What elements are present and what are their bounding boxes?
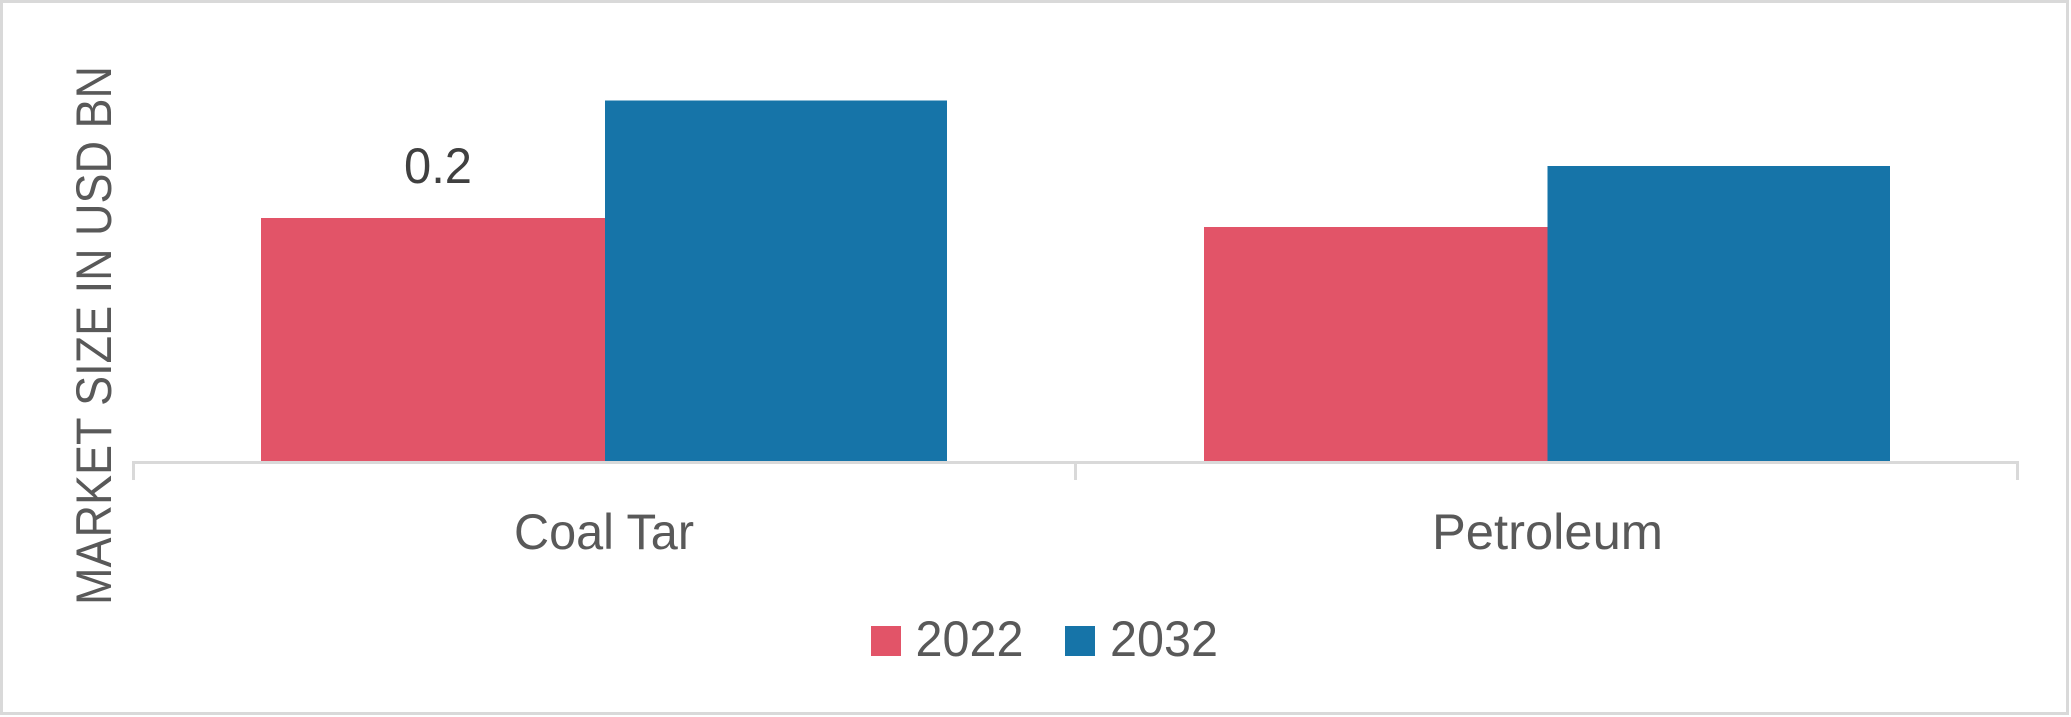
data label: Coal Tar 2022 value: 0.2 <box>404 138 472 194</box>
bar: Coal Tar 2022 <box>261 218 605 461</box>
x-axis with tick marks <box>132 461 2019 480</box>
legend swatch: 2022 <box>871 626 901 656</box>
category label: Coal Tar: Coal Tar <box>514 504 694 560</box>
legend label: 2022: 2022 <box>916 611 1024 667</box>
bar: Coal Tar 2032 <box>605 100 947 461</box>
legend swatch: 2032 <box>1065 626 1095 656</box>
legend <box>871 611 1218 667</box>
legend label: 2032: 2032 <box>1110 611 1218 667</box>
y-axis title: MARKET SIZE IN USD BN <box>66 66 122 605</box>
bar: Petroleum 2032 <box>1548 166 1890 461</box>
bar: Petroleum 2022 <box>1204 227 1548 461</box>
category label: Petroleum: Petroleum <box>1432 504 1663 560</box>
